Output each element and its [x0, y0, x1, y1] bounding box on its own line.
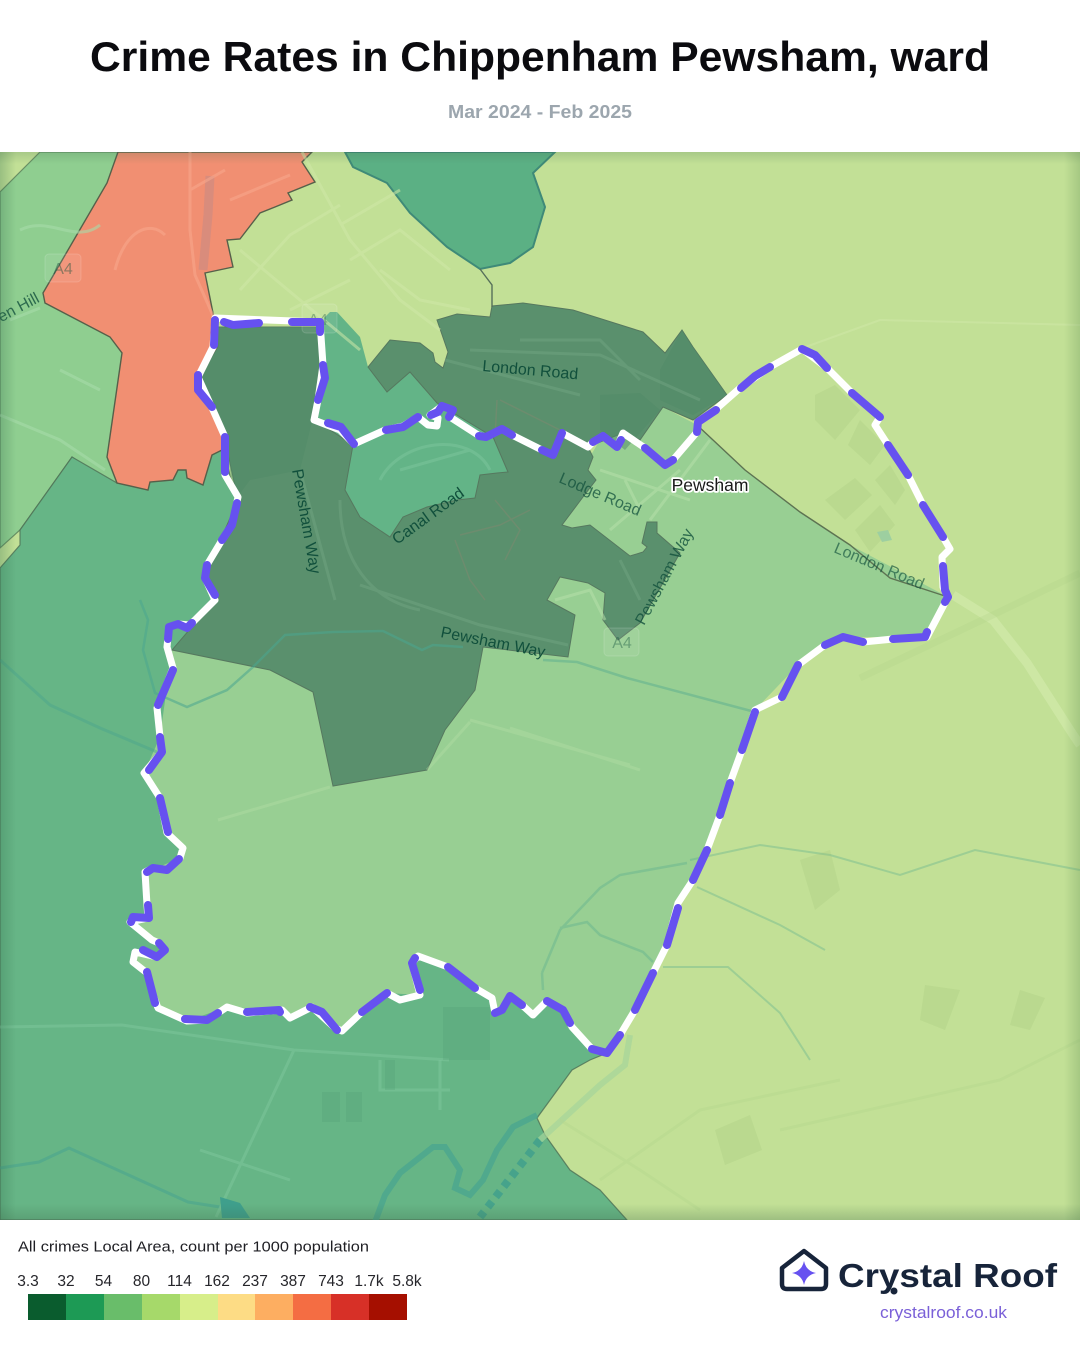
map detail: salmon canal and roads — [203, 176, 210, 270]
map detail: fields — [752, 425, 1039, 1142]
map edge vignette — [0, 152, 1080, 1220]
legend scale labels: 387 — [280, 1273, 306, 1290]
area: south-west mid green — [0, 440, 627, 1220]
map detail: darker patches — [218, 327, 302, 484]
legend scale labels: 32 — [57, 1273, 75, 1290]
legend scale labels: 114 — [167, 1273, 192, 1290]
map detail: rivers — [0, 600, 1080, 1222]
legend scale labels: 3.3 — [17, 1273, 39, 1290]
road labels: London Road — [482, 358, 579, 383]
map detail: London Road boundary line — [697, 425, 948, 597]
logo: Crystal Roof — [782, 1251, 1058, 1322]
subtitle: date range: Mar 2024 - Feb 2025 — [448, 101, 632, 122]
legend scale labels: 237 — [242, 1273, 268, 1290]
road labels: Pewsham Way — [633, 526, 697, 628]
logo wordmark: Crystal Roof — [838, 1257, 1058, 1294]
road labels: London Road — [831, 540, 927, 593]
legend scale labels: 5.8k — [392, 1273, 422, 1290]
area: central green — [315, 312, 508, 537]
legend scale labels: 80 — [133, 1273, 150, 1290]
map panel — [0, 152, 1080, 1222]
map background: low crime area — [0, 152, 1080, 1220]
area: dark green lowest crime — [172, 303, 727, 786]
road labels: A4 — [308, 312, 328, 329]
legend scale labels — [17, 1273, 422, 1290]
legend — [17, 1238, 422, 1320]
ward boundary white line — [130, 318, 950, 1053]
legend scale labels: 162 — [204, 1273, 230, 1290]
road labels: Canal Road — [389, 485, 468, 548]
legend title: All crimes Local Area, count per 1000 population — [18, 1238, 369, 1256]
road labels: A4 — [53, 261, 73, 278]
area: salmon high crime — [43, 152, 315, 490]
legend scale labels: 1.7k — [354, 1273, 384, 1290]
website link: crystalroof.co.uk — [880, 1304, 1008, 1322]
road labels — [0, 261, 927, 661]
icon: house with star — [782, 1251, 826, 1289]
legend colour swatches — [28, 1294, 407, 1320]
legend scale labels: 54 — [95, 1273, 112, 1290]
title: Crime Rates in Chippenham Pewsham, ward — [90, 33, 990, 80]
area: ward light green — [131, 407, 948, 1053]
road labels: Lodge Road — [556, 470, 643, 520]
area: north teal — [345, 152, 555, 269]
place label: Pewsham: Pewsham — [672, 475, 748, 495]
legend scale labels: 743 — [318, 1273, 344, 1290]
road labels: A4 — [612, 635, 632, 652]
road labels: Pewsham Way — [288, 468, 323, 575]
map detail: railway — [480, 1140, 540, 1217]
map detail: roads — [240, 152, 1080, 747]
area: west light green — [0, 152, 130, 548]
ward boundary purple dashes — [131, 320, 948, 1053]
road labels: Pewsham Way — [439, 624, 547, 661]
road shields A4 — [45, 254, 639, 656]
